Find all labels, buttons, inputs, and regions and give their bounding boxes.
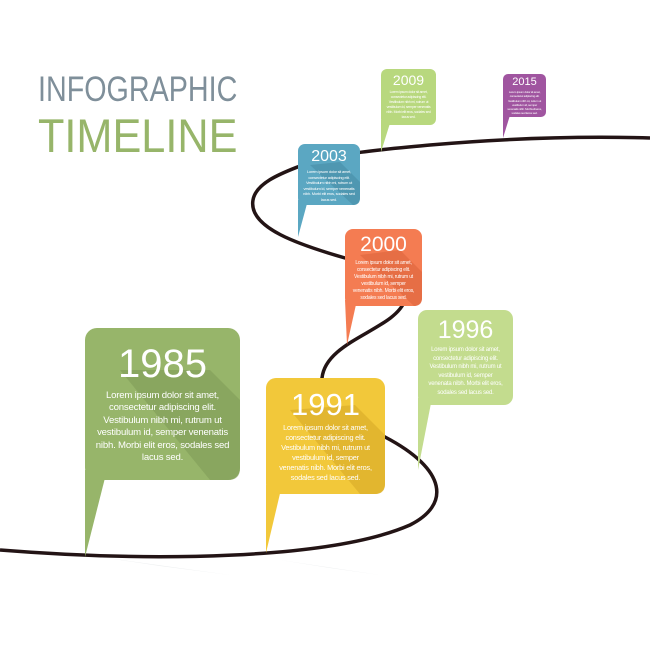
text: 2015: sodales sed lacus sed. <box>512 111 537 115</box>
text: 1991: Vestibulum nibh mi, rutrum ut <box>281 443 370 452</box>
text: 2000: vestibulum id, semper <box>361 281 406 287</box>
text: 2009: lacus sed. <box>402 115 415 119</box>
text: 2000: consectetur adipiscing elit. <box>357 267 410 273</box>
shadows <box>100 557 380 575</box>
text: 1996: consectetur adipiscing elit. <box>433 356 498 362</box>
text: 2015: vestibulum id, semper <box>512 103 537 107</box>
text: 2015: Lorem ipsum dolor sit amet, <box>509 90 540 94</box>
text: 1991 <box>279 387 372 482</box>
text: 2015: venenatis nibh. Morbi elit eros, <box>507 107 542 111</box>
bubble: 1991 <box>266 378 385 553</box>
title line 1: INFOGRAPHIC <box>38 70 237 109</box>
text: 2003: 2003 <box>311 148 347 165</box>
bubble: 2009 <box>381 69 436 152</box>
text: 1996: Vestibulum nibh mi, rutrum ut <box>430 364 501 370</box>
text: 1996: 1996 <box>438 316 493 344</box>
text: 1991: Lorem ipsum dolor sit amet, <box>283 423 368 432</box>
text: 2009: Vestibulum nibh mi, rutrum ut <box>389 100 428 104</box>
text: 1985: Vestibulum nibh mi, rutrum ut <box>103 415 222 426</box>
text: 1991: venenatis nibh. Morbi elit eros, <box>279 463 372 472</box>
bubble: 2000 <box>345 229 422 345</box>
text: 1996: sodales sed lacus sed. <box>437 390 494 396</box>
text: 1985 <box>96 342 229 463</box>
text: 2003: vestibulum id, semper venenatis <box>304 186 354 190</box>
text: 1996: venenata nibh. Morbi elit eros, <box>428 381 503 387</box>
text: 1991: 1991 <box>291 387 360 422</box>
text: 1985: nibh. Morbi elit eros, sodales sed <box>96 440 229 451</box>
title line 2: TIMELINE <box>38 109 237 162</box>
text: 2000: sodales sed lacus sed. <box>360 295 407 301</box>
bubble: 2003 <box>298 144 360 237</box>
text: 2003 <box>303 148 355 202</box>
text: 1985: lacus sed. <box>142 452 183 463</box>
text: 1996 <box>428 316 503 396</box>
text: 2000 <box>352 233 414 301</box>
text: 1985: vestibulum id, semper venenatis <box>97 427 228 438</box>
text: 2009 <box>386 72 431 119</box>
text: 2003: Vestibulum nibh mi, rutrum ut <box>306 180 352 185</box>
text: 2015 <box>507 76 542 115</box>
title <box>38 70 237 162</box>
text: 1991: consectetur adipiscing elit. <box>286 433 365 442</box>
text: 2003: lacus sed. <box>321 196 337 202</box>
text: 2000: venenatis nibh. Morbi elit eros, <box>353 288 414 294</box>
bubble: 1985 <box>85 328 240 557</box>
text: 2000: Vestibulum nibh mi, rutrum ut <box>354 274 413 280</box>
text: 2003: Lorem ipsum dolor sit amet, <box>307 169 351 174</box>
text: 1991: vestibulum id, semper <box>292 453 359 462</box>
text: 1985: consectetur adipiscing elit. <box>109 402 216 413</box>
bubble: 2015 <box>503 74 546 138</box>
text: 2015: consectetur adipiscing elit. <box>510 94 539 98</box>
text: 2009: consectetur adipiscing elit. <box>391 95 426 99</box>
text: 2009: 2009 <box>393 72 424 88</box>
text: 2015: Vestibulum nibh mi, rutrum ut <box>508 99 541 103</box>
text: 1985: 1985 <box>118 342 207 386</box>
text: 1985: Lorem ipsum dolor sit amet, <box>106 390 219 401</box>
text: 2015: 2015 <box>512 76 537 88</box>
text: 1991: sodales sed lacus sed. <box>291 473 360 482</box>
text: 2009: vestibulum id, semper venenatis <box>387 105 430 109</box>
text: 2000: 2000 <box>360 233 407 256</box>
text: 2000: Lorem ipsum dolor sit amet, <box>355 260 412 266</box>
text: 2009: nibh. Morbi elit eros, sodales sed <box>386 110 431 114</box>
text: 1996: vestibulum id, semper <box>438 372 493 378</box>
text: 2009: Lorem ipsum dolor sit amet, <box>390 90 427 94</box>
bubble: 1996 <box>418 310 513 470</box>
text: 2003: nibh. Morbi elit eros, sodales sed <box>303 191 355 196</box>
curve <box>0 137 650 557</box>
text: 1996: Lorem ipsum dolor sit amet, <box>431 347 500 353</box>
text: 2003: consectetur adipiscing elit. <box>308 174 350 180</box>
